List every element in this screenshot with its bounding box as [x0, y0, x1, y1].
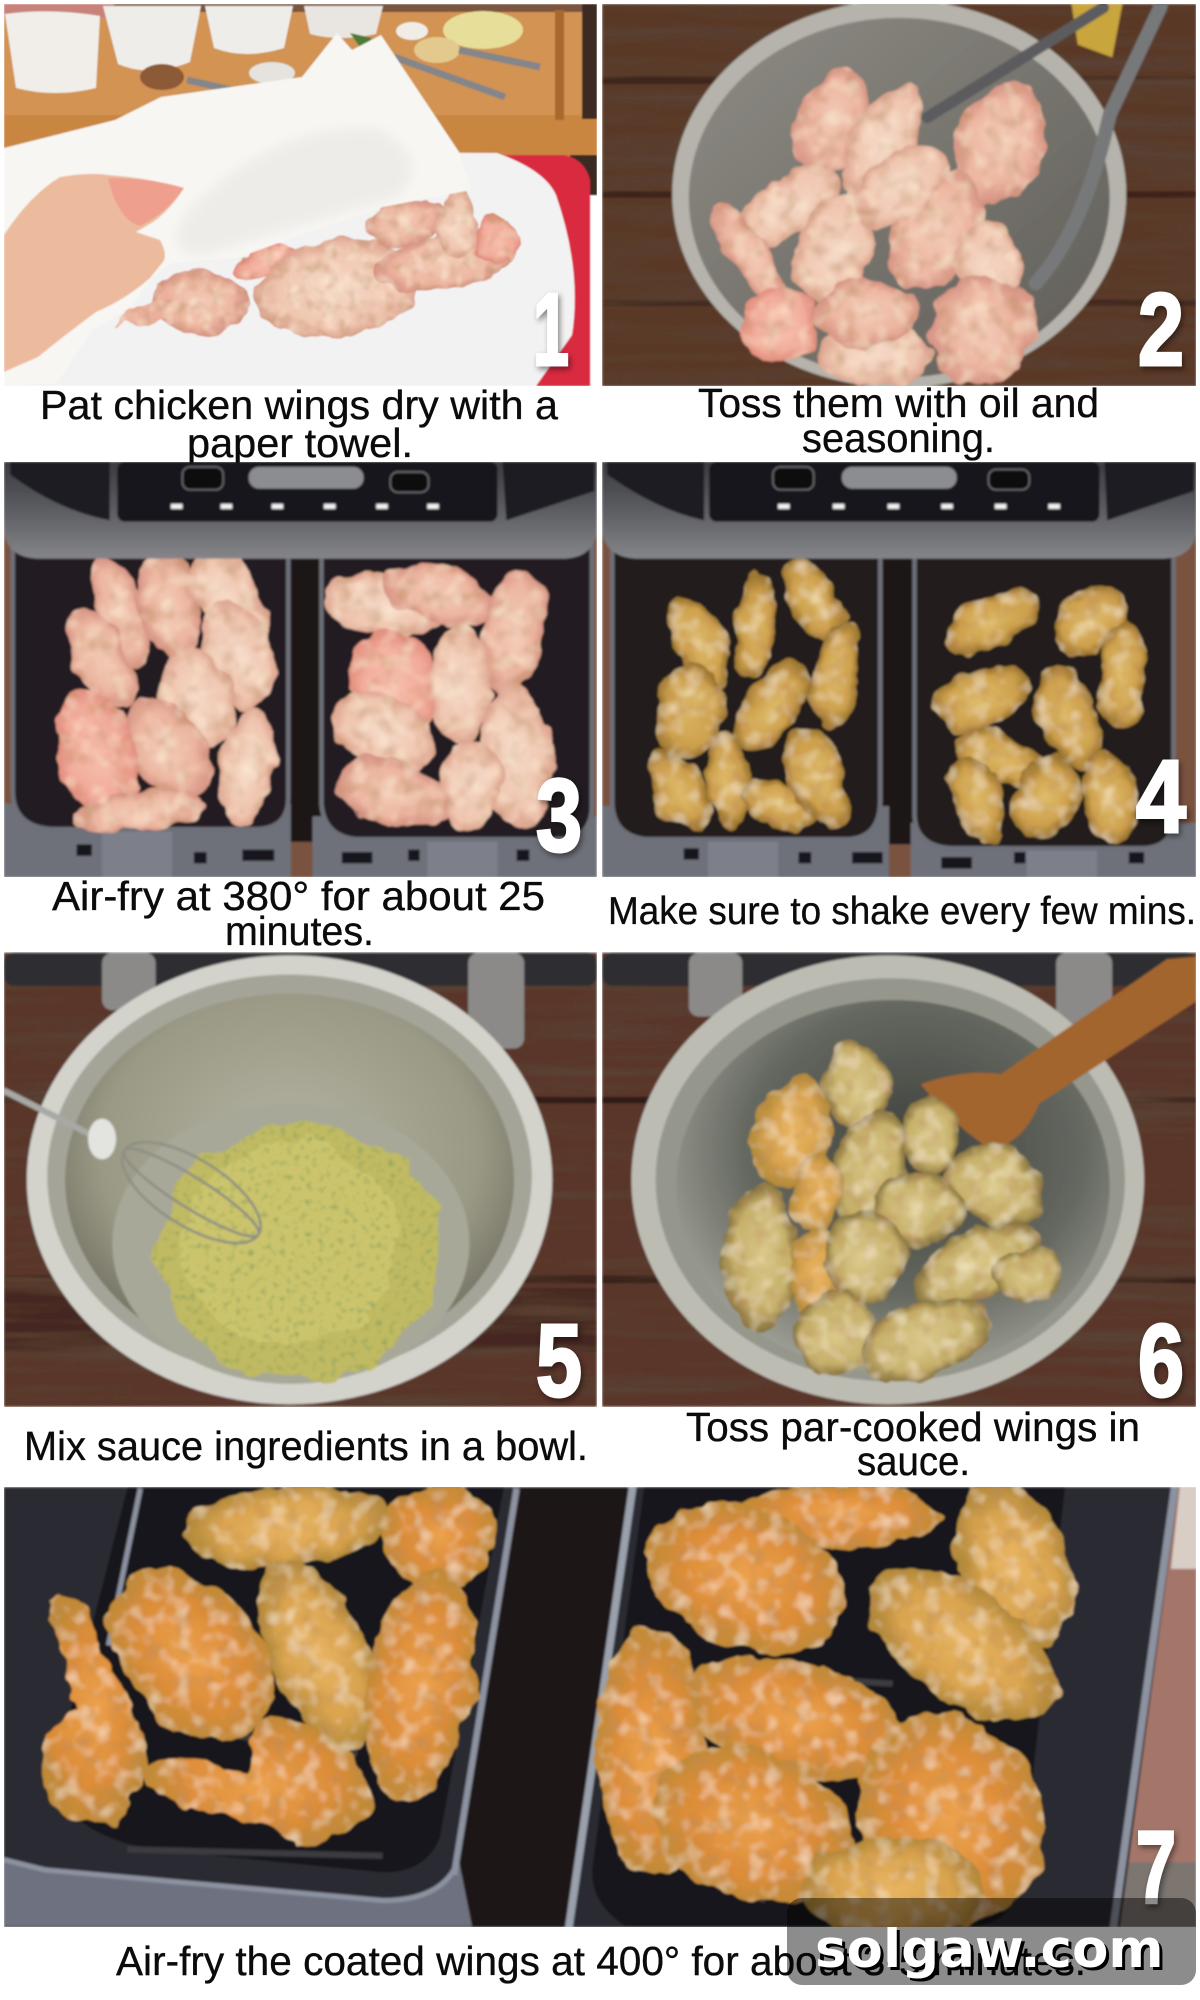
step number 1: 1	[533, 272, 569, 387]
handles of fryer baskets	[4, 804, 597, 878]
sauce coated wings	[723, 1036, 1062, 1399]
panel: step 3 photo, raw wings in air fryer	[4, 462, 597, 878]
metal bowl	[672, 0, 1126, 388]
caption: step 2	[698, 380, 1099, 461]
wooden spoon	[921, 957, 1196, 1148]
panel: step 7 photo, finished wings in air fryer	[4, 1464, 1196, 1950]
panel: step 6 photo, tossing wings in sauce	[602, 953, 1196, 1418]
caption: step 6	[686, 1404, 1140, 1484]
caption: step 2: seasoning.	[802, 415, 995, 461]
caption: step 7: Air-fry the coated wings at 400° for about 3-5 minutes.	[116, 1938, 1086, 1984]
golden wings, right basket	[923, 570, 1151, 850]
fryer baskets	[612, 529, 1173, 848]
air fryer baskets	[4, 1487, 1196, 1927]
background behind fryer	[4, 462, 597, 878]
caption: step 3: Air-fry at 380° for about 25	[52, 873, 545, 919]
fryer baskets	[13, 523, 592, 839]
step number 5: 5	[536, 1303, 582, 1418]
metal bowl with sauce	[27, 955, 552, 1404]
basket grill slots	[128, 1671, 893, 1900]
seasoned raw wings	[708, 65, 1049, 386]
step number 7: 7	[1136, 1810, 1176, 1925]
golden wings, left basket	[633, 552, 871, 845]
panel: step 2 photo, tossing wings in bowl	[602, 0, 1196, 399]
metal bowl	[631, 955, 1144, 1404]
background behind fryer	[602, 462, 1196, 878]
step number 4: 4	[1136, 739, 1186, 854]
raw chicken wings on board	[115, 188, 520, 347]
watermark badge: solgaw.com	[815, 1919, 1164, 1980]
caption: step 6: sauce.	[857, 1438, 970, 1484]
wood table and appliance behind	[4, 953, 597, 1407]
handles of fryer baskets	[602, 806, 1196, 878]
dark counter at right	[570, 155, 597, 195]
sauce mixture	[157, 1125, 443, 1380]
caption: step 3	[52, 873, 545, 954]
caption: step 1	[40, 382, 558, 466]
wood table	[602, 4, 1196, 386]
panel: step 5 photo, mixing sauce	[4, 953, 597, 1418]
step number 6: 6	[1138, 1303, 1184, 1418]
red board	[497, 155, 590, 386]
roasted wings, left basket	[40, 1477, 496, 1849]
wood table and appliance behind	[602, 953, 1196, 1407]
raw wings, left basket	[53, 557, 282, 835]
caption: step 5: Mix sauce ingredients in a bowl.	[24, 1423, 588, 1469]
caption: step 1: paper towel.	[187, 420, 413, 466]
white cutting board	[4, 150, 575, 386]
wire whisk	[4, 1091, 276, 1263]
step number 2: 2	[1138, 272, 1184, 387]
roasted wings, right basket	[594, 1464, 1096, 1950]
cutting board with ingredients	[4, 4, 597, 159]
panel: step 4 photo, par-cooked wings in air fryer	[602, 462, 1196, 878]
paper towel	[4, 34, 467, 310]
air fryer housing and control panel	[4, 462, 597, 559]
metal tongs	[927, 6, 1161, 283]
caption: step 1: Pat chicken wings dry with a	[40, 382, 558, 428]
watermark badge: solgaw.com	[818, 1922, 1167, 1983]
hand holding towel	[4, 174, 184, 372]
caption: step 6: Toss par-cooked wings in	[686, 1404, 1140, 1450]
watermark badge	[787, 1898, 1196, 1985]
air fryer housing and control panel	[602, 462, 1196, 559]
step number 3: 3	[536, 758, 582, 873]
raw wings, right basket	[317, 552, 558, 841]
caption: step 3: minutes.	[225, 908, 374, 954]
caption: step 2: Toss them with oil and	[698, 380, 1099, 426]
panel: step 1 photo, patting wings dry	[4, 4, 597, 387]
